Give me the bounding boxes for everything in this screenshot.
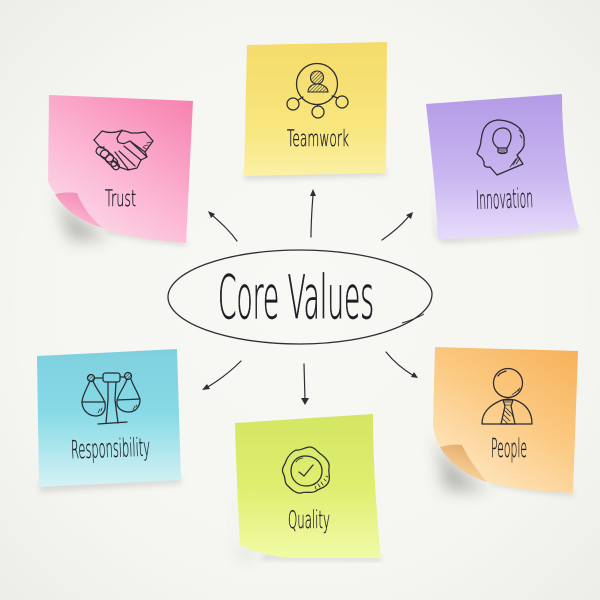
note: Trust (48, 95, 193, 246)
fold corner (55, 192, 103, 228)
note: Quality: Quality (288, 506, 330, 534)
note: Responsibility (37, 349, 181, 492)
arrow: to Trust (208, 211, 237, 241)
central ellipse with title (168, 250, 432, 344)
arrow: to Innovation (382, 212, 413, 240)
icon: balance scale (82, 372, 140, 424)
note: Teamwork (244, 42, 387, 180)
icon: quality badge (282, 447, 329, 493)
icon: handshake (94, 130, 153, 171)
arrow: to Responsibility (202, 361, 241, 390)
note: People: People (491, 434, 527, 464)
note: Quality (235, 414, 381, 561)
note: Responsibility: Responsibility (70, 433, 150, 464)
label: Trust: Trust (105, 187, 136, 212)
note: People (433, 347, 578, 496)
central ellipse with title: Core Values (218, 263, 374, 333)
note: Innovation (426, 94, 579, 243)
icon: head with light bulb (477, 120, 524, 175)
arrow: to People (386, 352, 418, 378)
icon: teamwork network (287, 64, 348, 118)
icon: person with tie (482, 368, 532, 424)
arrow: to Teamwork (310, 189, 316, 237)
fold corner (440, 445, 487, 482)
arrow: to Quality (301, 364, 309, 405)
label: Teamwork: Teamwork (287, 127, 349, 152)
